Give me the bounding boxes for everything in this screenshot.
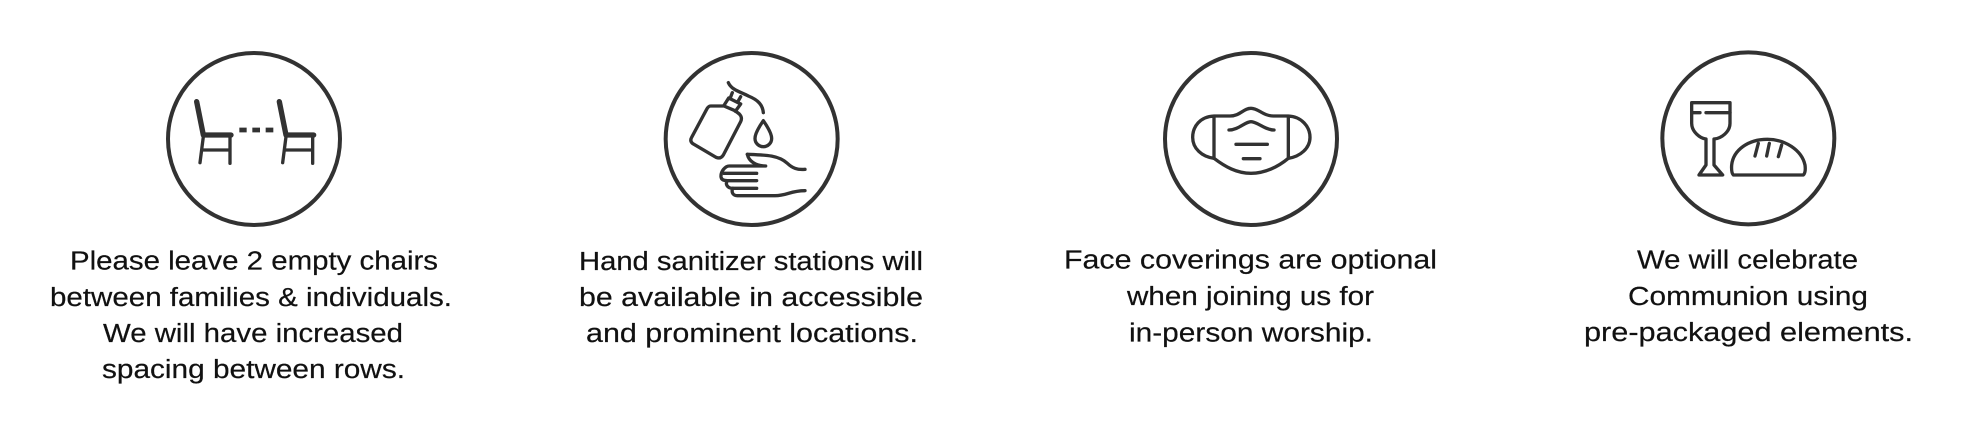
text: sanitizer caption: be available in accessible bbox=[579, 284, 923, 312]
text: chairs caption: We will have increased bbox=[103, 320, 403, 348]
text: face coverings caption bbox=[1064, 246, 1437, 348]
text: chairs caption: Please leave 2 empty chairs bbox=[70, 248, 438, 276]
text: chairs caption: between families & individuals. bbox=[50, 284, 452, 312]
text: communion caption: pre-packaged elements. bbox=[1584, 319, 1913, 347]
text: sanitizer caption bbox=[579, 248, 923, 348]
panel: hand sanitizer bbox=[579, 53, 923, 348]
text: communion caption: Communion using bbox=[1628, 283, 1868, 311]
icon: chalice and bread in a circle bbox=[1662, 52, 1834, 224]
text: face coverings caption: when joining us for bbox=[1126, 283, 1375, 311]
text: face coverings caption: Face coverings are optional bbox=[1064, 246, 1437, 274]
panel: communion bbox=[1584, 52, 1913, 347]
text: chairs caption bbox=[50, 248, 452, 384]
text: chairs caption: spacing between rows. bbox=[102, 356, 405, 384]
icon: two chairs in a circle bbox=[168, 53, 340, 225]
panel: empty chairs bbox=[50, 53, 452, 384]
icon: face mask in a circle bbox=[1165, 53, 1337, 225]
text: face coverings caption: in-person worship. bbox=[1129, 320, 1373, 348]
text: communion caption: We will celebrate bbox=[1637, 246, 1858, 274]
panel: face coverings bbox=[1064, 53, 1437, 347]
text: sanitizer caption: and prominent locations. bbox=[586, 320, 918, 348]
text: sanitizer caption: Hand sanitizer stations will bbox=[579, 248, 923, 276]
text: communion caption bbox=[1584, 246, 1913, 347]
icon: sanitizer bottle and hand in a circle bbox=[666, 53, 838, 225]
